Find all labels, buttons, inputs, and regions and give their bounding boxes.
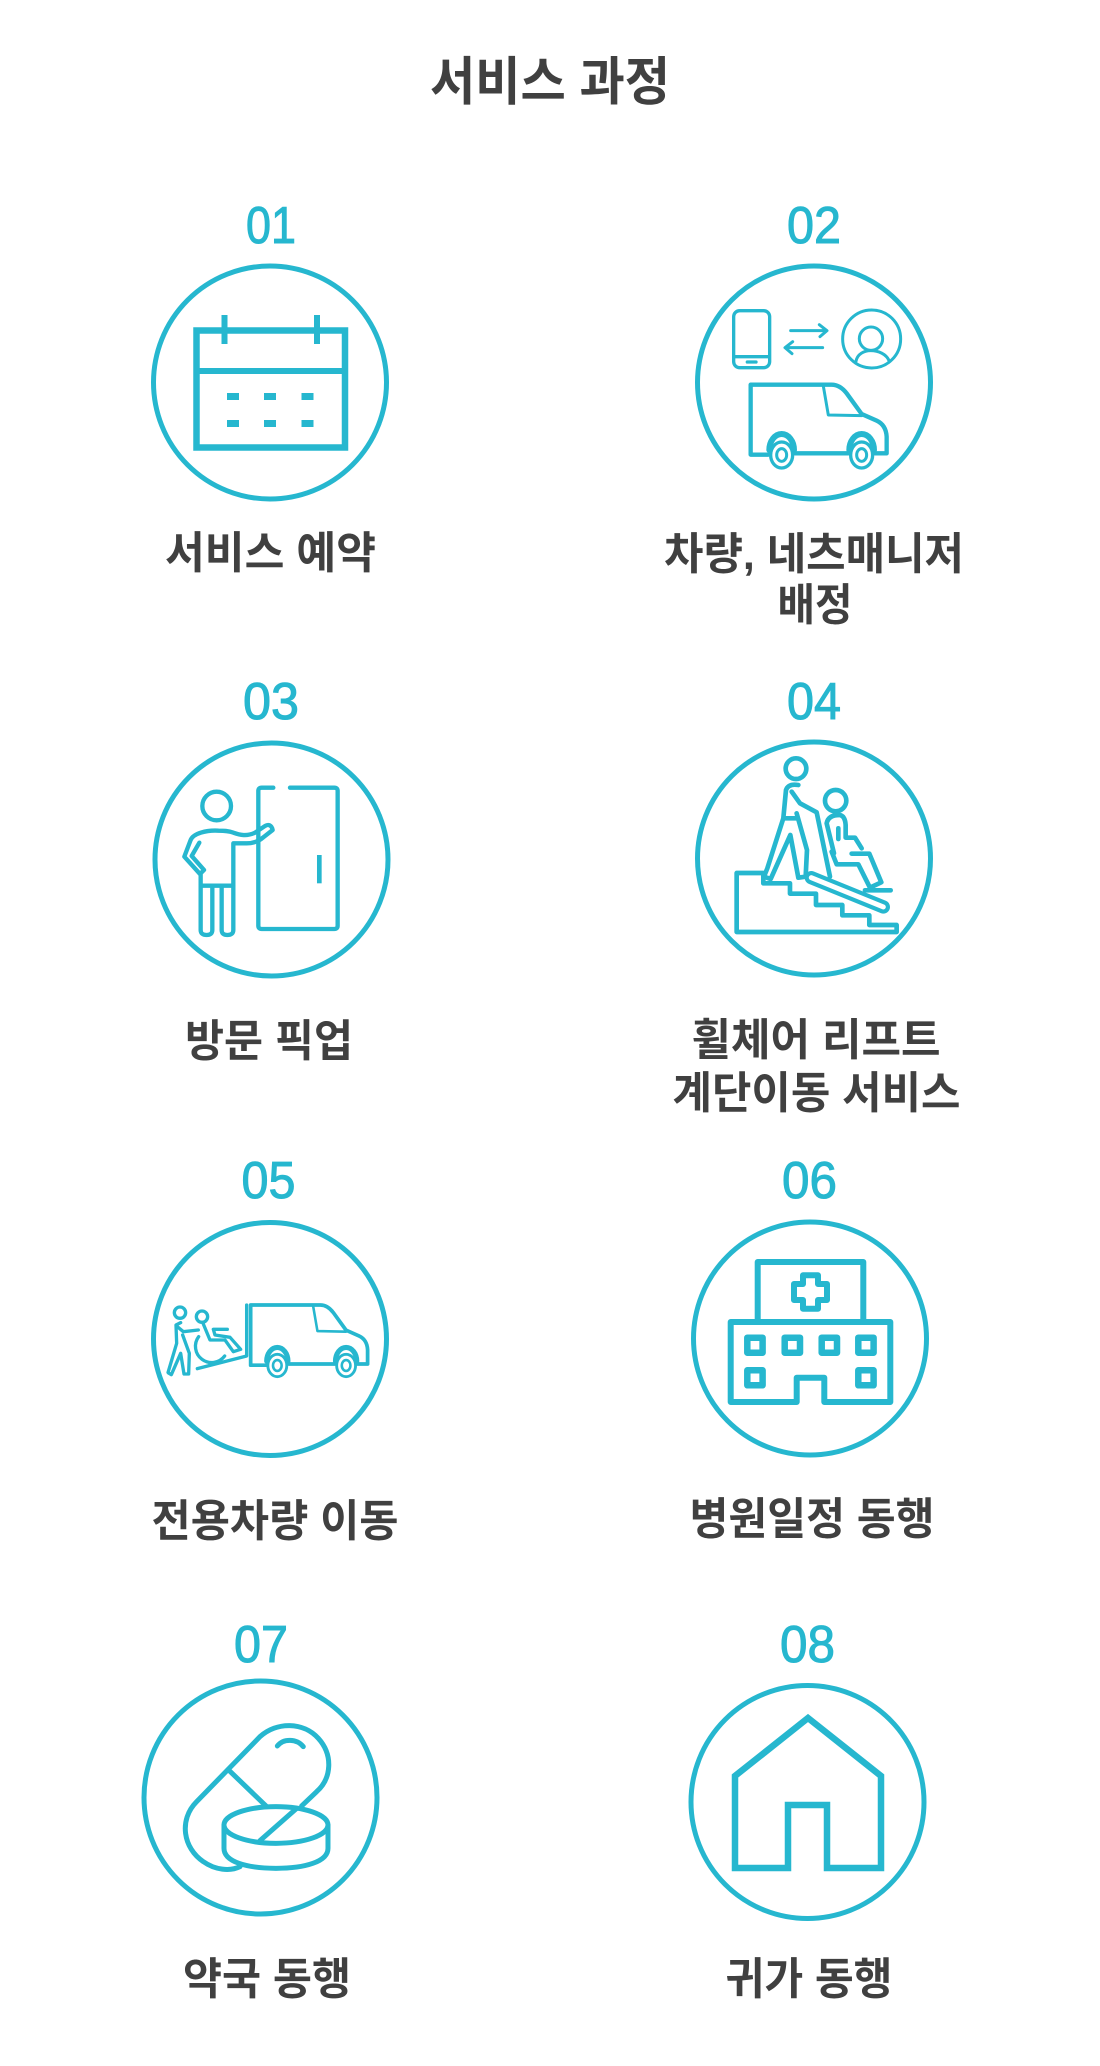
step 06: hospital accompaniment bbox=[690, 1152, 934, 1544]
step 02: vehicle and manager assignment bbox=[664, 197, 964, 630]
number 02: 02 bbox=[787, 197, 841, 255]
label 04: 휠체어 리프트 bbox=[692, 1016, 940, 1065]
number 03: 03 bbox=[243, 673, 299, 731]
van bbox=[251, 1305, 368, 1377]
lift rail bbox=[811, 878, 883, 907]
helper bbox=[786, 758, 806, 779]
step 03: visit pickup bbox=[155, 673, 388, 1066]
label 02: 차량, 네츠매니저 bbox=[664, 530, 964, 579]
person bbox=[202, 792, 231, 820]
number 01: 01 bbox=[246, 197, 296, 255]
number 04: 04 bbox=[787, 673, 841, 731]
label 05: 전용차량 이동 bbox=[152, 1497, 398, 1546]
step 01: service booking bbox=[154, 197, 386, 578]
step 04: wheelchair lift stair service bbox=[672, 673, 960, 1118]
label 08: 귀가 동행 bbox=[726, 1955, 892, 2004]
number 08: 08 bbox=[780, 1616, 835, 1674]
phone bbox=[734, 311, 770, 368]
exchange arrows bbox=[785, 325, 827, 354]
people and wheelchair bbox=[168, 1307, 241, 1375]
number 07: 07 bbox=[234, 1616, 288, 1674]
icon: wheelchair ramp and van bbox=[168, 1305, 368, 1377]
icon: stair lift bbox=[737, 758, 897, 932]
circle 08 bbox=[691, 1686, 924, 1918]
step 05: dedicated vehicle transfer bbox=[152, 1152, 398, 1546]
circle 04 bbox=[698, 742, 930, 975]
step 08: return home accompaniment bbox=[691, 1616, 924, 2004]
icon: phone, person and van bbox=[734, 310, 901, 468]
label 03: 방문 픽업 bbox=[185, 1017, 353, 1066]
icon: house bbox=[735, 1718, 881, 1868]
step 02: vehicle and manager assignment: 배정 bbox=[778, 581, 852, 630]
icon: hospital bbox=[731, 1262, 890, 1402]
step 07: pharmacy accompaniment bbox=[144, 1616, 377, 2004]
icon: person at door bbox=[184, 788, 338, 935]
van bbox=[751, 385, 887, 468]
icon: calendar bbox=[196, 315, 345, 448]
person in circle bbox=[843, 310, 901, 368]
label 06: 병원일정 동행 bbox=[690, 1495, 934, 1544]
stairs bbox=[737, 873, 897, 932]
number 05: 05 bbox=[242, 1152, 296, 1210]
lift and ramp bbox=[197, 1305, 247, 1369]
windows bbox=[747, 1338, 874, 1385]
circle 01 bbox=[154, 266, 386, 499]
capsule bbox=[185, 1726, 329, 1869]
icon: capsule and tablet bbox=[185, 1726, 329, 1869]
circle 05 bbox=[154, 1222, 386, 1456]
step 04: wheelchair lift stair service: 계단이동 서비스 bbox=[672, 1069, 960, 1118]
tablet bbox=[224, 1807, 328, 1843]
passenger bbox=[825, 790, 846, 811]
circle 02 bbox=[698, 266, 930, 499]
label 01: 서비스 예약 bbox=[165, 529, 376, 578]
circle 07 bbox=[144, 1681, 377, 1914]
door bbox=[258, 788, 338, 929]
number 06: 06 bbox=[782, 1152, 837, 1210]
circle 06 bbox=[694, 1222, 926, 1455]
circle 03 bbox=[155, 743, 388, 976]
label 07: 약국 동행 bbox=[183, 1955, 351, 2004]
title: 서비스 과정 bbox=[430, 54, 670, 112]
cross bbox=[794, 1275, 827, 1309]
